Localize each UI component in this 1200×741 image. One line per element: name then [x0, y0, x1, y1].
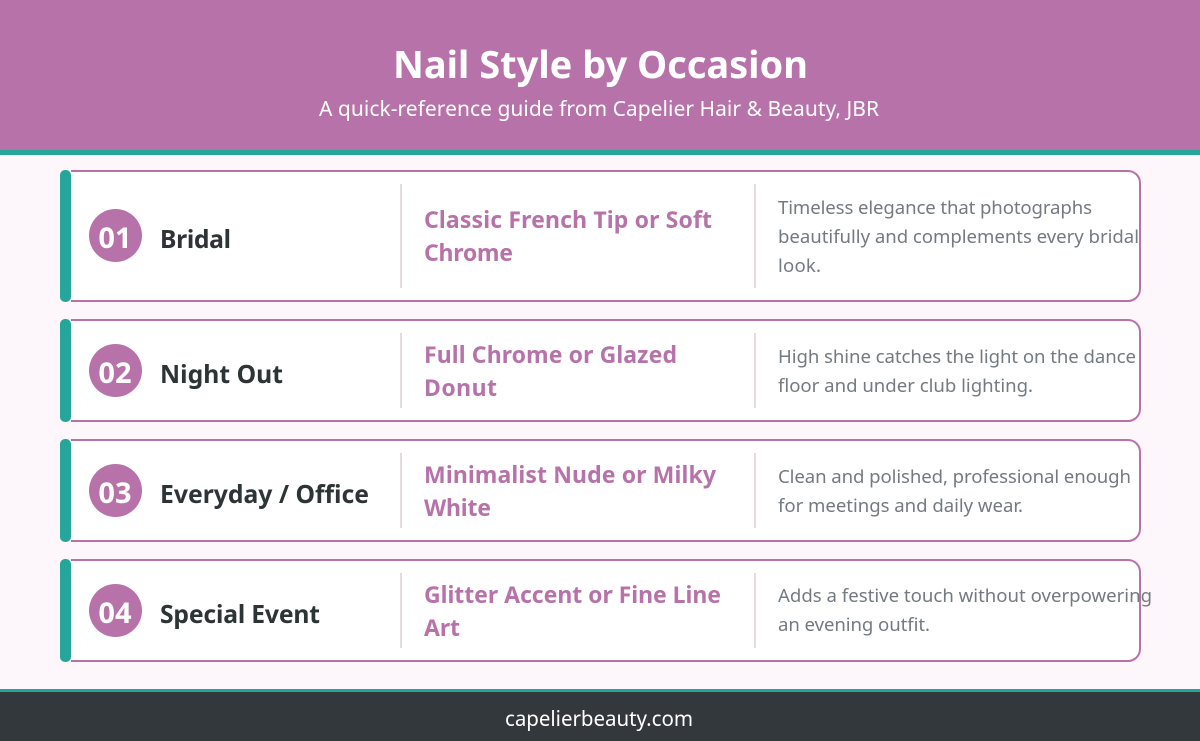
description: Adds a festive touch without overpowering: [778, 583, 1152, 608]
title: Nail Style by Occasion: [393, 38, 808, 90]
number badge 04: 04: [98, 593, 132, 632]
number badge 04: [89, 584, 142, 637]
occasion: Special Event: [160, 598, 320, 631]
style: [424, 458, 717, 523]
number badge 01: 01: [98, 218, 132, 257]
occasion: Everyday / Office: [160, 478, 369, 511]
description: an evening outfit.: [778, 612, 930, 637]
description: [778, 344, 1136, 398]
occasion: Night Out: [160, 358, 283, 391]
description: High shine catches the light on the dance: [778, 344, 1136, 369]
footer: [0, 689, 1200, 741]
style: Minimalist Nude or Milky: [424, 458, 717, 490]
row 2: Night Out: [60, 319, 1140, 422]
style: Full Chrome or Glazed: [424, 338, 677, 370]
footer: capelierbeauty.com: [505, 705, 693, 733]
style: Classic French Tip or Soft: [424, 203, 712, 235]
style: [424, 203, 712, 268]
description: Clean and polished, professional enough: [778, 464, 1131, 489]
style: Glitter Accent or Fine Line: [424, 578, 721, 610]
row 4: Special Event: [60, 559, 1152, 662]
description: look.: [778, 253, 821, 278]
description: [778, 195, 1139, 278]
description: [778, 464, 1131, 518]
style: [424, 338, 677, 403]
row 1: Bridal: [60, 170, 1140, 302]
style: [424, 578, 721, 643]
header band: [0, 0, 1200, 155]
style: Chrome: [424, 236, 513, 268]
style: White: [424, 491, 491, 523]
style: Donut: [424, 371, 497, 403]
style: Art: [424, 611, 460, 643]
number badge 03: [89, 464, 142, 517]
number badge 02: [89, 344, 142, 397]
description: for meetings and daily wear.: [778, 493, 1023, 518]
number badge 01: [89, 209, 142, 262]
description: Timeless elegance that photographs: [778, 195, 1092, 220]
subtitle: A quick-reference guide from Capelier Hair & Beauty, JBR: [319, 95, 879, 123]
number badge 03: 03: [98, 473, 132, 512]
number badge 02: 02: [98, 353, 132, 392]
occasion: Bridal: [160, 223, 231, 256]
description: [778, 583, 1152, 637]
description: floor and under club lighting.: [778, 373, 1033, 398]
row 3: Everyday / Office: [60, 439, 1140, 542]
description: beautifully and complements every bridal: [778, 224, 1139, 249]
